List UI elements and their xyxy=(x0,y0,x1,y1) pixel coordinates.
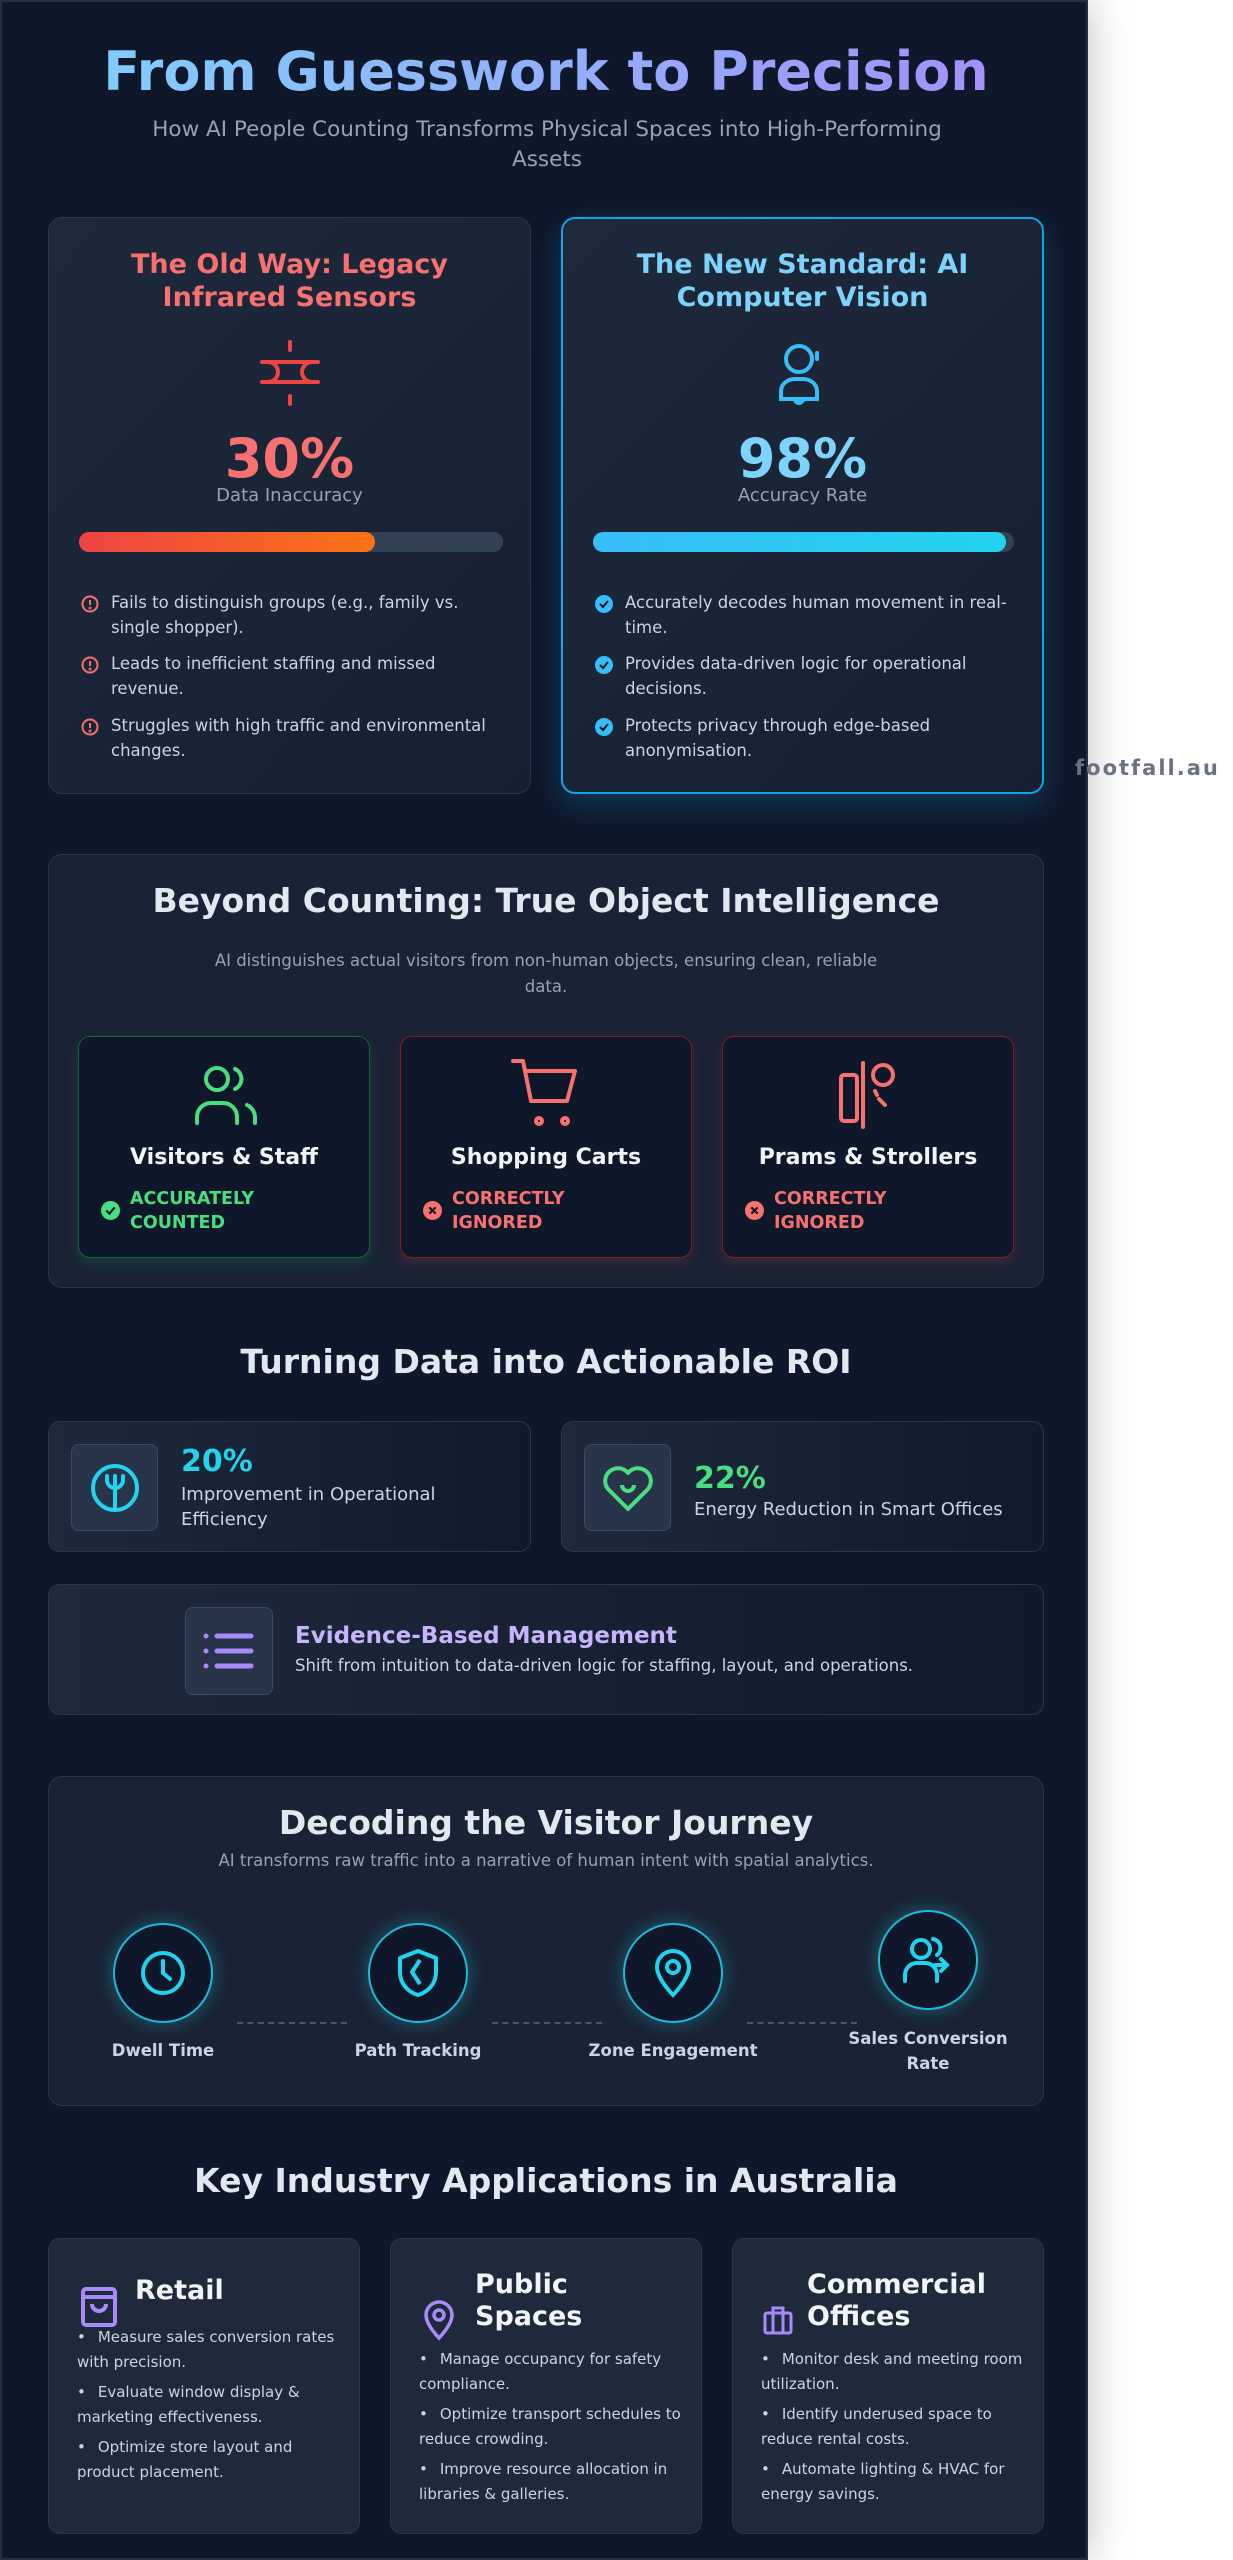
step: dwell time xyxy=(113,1923,213,2023)
bullet list: old way: Struggles with high traffic and environmental changes. xyxy=(111,716,486,760)
title xyxy=(807,2269,986,2332)
title: From Guesswork to Precision xyxy=(103,40,989,103)
bullets: Optimize transport schedules to reduce crowding. xyxy=(419,2405,681,2448)
bullets: Measure sales conversion rates with precision. xyxy=(77,2328,334,2371)
text: Shift from intuition to data-driven logic for staffing, layout, and operations. xyxy=(295,1656,913,1675)
heading: Decoding the Visitor Journey xyxy=(279,1803,813,1842)
step: path tracking xyxy=(368,1923,468,2023)
status xyxy=(745,1189,887,1233)
connectors xyxy=(237,2022,347,2024)
bullets: Monitor desk and meeting room utilization. xyxy=(761,2350,1022,2393)
subtitle: How AI People Counting Transforms Physical Spaces into High-Performing Assets xyxy=(152,117,942,172)
icon box xyxy=(584,1444,671,1531)
heading: ROI: Turning Data into Actionable ROI xyxy=(240,1342,852,1381)
title xyxy=(475,2269,582,2332)
name: Visitors & Staff xyxy=(130,1145,318,1170)
bar: 98% xyxy=(593,532,1014,552)
icon: infrared sensor xyxy=(260,340,320,406)
label: sales conversion: Rate xyxy=(907,2054,949,2073)
stat: 98%: 98% xyxy=(738,427,867,490)
label: sales conversion xyxy=(848,2029,1008,2073)
bullet list: old way xyxy=(82,593,486,760)
bullets: Optimize store layout and product placement. xyxy=(77,2438,292,2481)
icon: cart xyxy=(511,1059,577,1126)
panel: visitor journey xyxy=(48,1776,1044,2106)
label: path tracking: Path Tracking xyxy=(355,2041,481,2060)
icon box xyxy=(185,1607,273,1695)
status xyxy=(101,1189,254,1233)
card: carts xyxy=(400,1036,692,1258)
bullet list: old way: Fails to distinguish groups (e.g., family vs. single shopper). xyxy=(111,593,458,637)
status: ACCURATELY xyxy=(130,1189,254,1209)
label: Data Inaccuracy xyxy=(216,485,363,506)
status: COUNTED xyxy=(130,1213,225,1233)
text: description: AI distinguishes actual visitors from non-human objects, ensuring clean, reliable data. xyxy=(215,951,877,996)
heading: Beyond Counting: True Object Intelligence xyxy=(152,881,940,920)
icon: person scan xyxy=(779,344,819,405)
bullets: Automate lighting & HVAC for energy savings. xyxy=(761,2460,1004,2503)
watermark: footfall.au xyxy=(1075,756,1220,780)
bullets xyxy=(761,2350,1022,2503)
icon: pram xyxy=(839,1061,895,1129)
title: Evidence-Based Management xyxy=(295,1623,677,1649)
bullets xyxy=(419,2350,681,2503)
text: Energy Reduction in Smart Offices xyxy=(694,1499,1003,1520)
bullets: Evaluate window display & marketing effectiveness. xyxy=(77,2383,300,2426)
icon: bag xyxy=(81,2287,117,2327)
status: IGNORED xyxy=(452,1213,542,1233)
status xyxy=(423,1189,565,1233)
heading: old way xyxy=(131,249,448,313)
card: commercial offices xyxy=(732,2238,1044,2534)
icon: users xyxy=(195,1066,257,1125)
name: Prams & Strollers xyxy=(759,1145,977,1170)
card: visitors xyxy=(78,1036,370,1258)
text: Improvement in Operational Efficiency xyxy=(181,1484,436,1530)
step: zone engagement xyxy=(623,1923,723,2023)
bullet list: new standard: Protects privacy through edge-based anonymisation. xyxy=(625,716,930,760)
title: Spaces xyxy=(475,2301,582,2332)
label: zone engagement: Zone Engagement xyxy=(589,2041,757,2060)
bullets: Improve resource allocation in libraries & galleries. xyxy=(419,2460,667,2503)
panel: old way xyxy=(48,217,531,794)
bullet list: new standard: Provides data-driven logic for operational decisions. xyxy=(625,654,966,698)
icon box xyxy=(71,1444,158,1531)
heading: new standard: The New Standard: AI xyxy=(637,249,968,280)
bullets: Manage occupancy for safety compliance. xyxy=(419,2350,661,2393)
step: sales conversion xyxy=(878,1910,978,2010)
card: 20% efficiency xyxy=(48,1421,531,1552)
bullet list: new standard: Accurately decodes human movement in real-time. xyxy=(625,593,1007,637)
heading: old way: Infrared Sensors xyxy=(163,282,416,313)
title: Retail xyxy=(135,2275,224,2306)
icon: pin xyxy=(424,2300,454,2340)
title: Offices xyxy=(807,2301,910,2332)
bar: 30% xyxy=(79,532,503,552)
card: evidence-based xyxy=(48,1584,1044,1715)
bullets: Identify underused space to reduce rental costs. xyxy=(761,2405,992,2448)
card: prams xyxy=(722,1036,1014,1258)
label: dwell time: Dwell Time xyxy=(112,2041,214,2060)
card: 22% energy xyxy=(561,1421,1044,1552)
bullet list: old way: Leads to inefficient staffing and missed revenue. xyxy=(111,654,435,698)
icon: briefcase xyxy=(764,2306,792,2334)
status: CORRECTLY xyxy=(774,1189,887,1209)
bullet list: new standard xyxy=(595,593,1007,760)
name: Shopping Carts xyxy=(451,1145,641,1170)
text: AI transforms raw traffic into a narrative of human intent with spatial analytics. xyxy=(218,1851,873,1870)
status: IGNORED xyxy=(774,1213,864,1233)
panel: object intelligence xyxy=(48,854,1044,1288)
heading: industry: Key Industry Applications in Australia xyxy=(194,2161,898,2200)
card: public spaces xyxy=(390,2238,702,2534)
status: CORRECTLY xyxy=(452,1189,565,1209)
label: Accuracy Rate xyxy=(738,485,867,506)
stat: 22% xyxy=(694,1461,766,1496)
heading: new standard: Computer Vision xyxy=(677,282,928,313)
stat: 30%: 30% xyxy=(225,427,354,490)
card: retail xyxy=(48,2238,360,2534)
title: Public xyxy=(475,2269,568,2300)
title: Commercial xyxy=(807,2269,986,2300)
label: sales conversion: Sales Conversion xyxy=(848,2029,1008,2048)
panel: new standard xyxy=(561,217,1044,794)
bullets xyxy=(77,2328,334,2481)
heading: new standard xyxy=(636,249,968,313)
heading: old way: The Old Way: Legacy xyxy=(131,249,448,280)
stat: 20% xyxy=(181,1444,253,1479)
